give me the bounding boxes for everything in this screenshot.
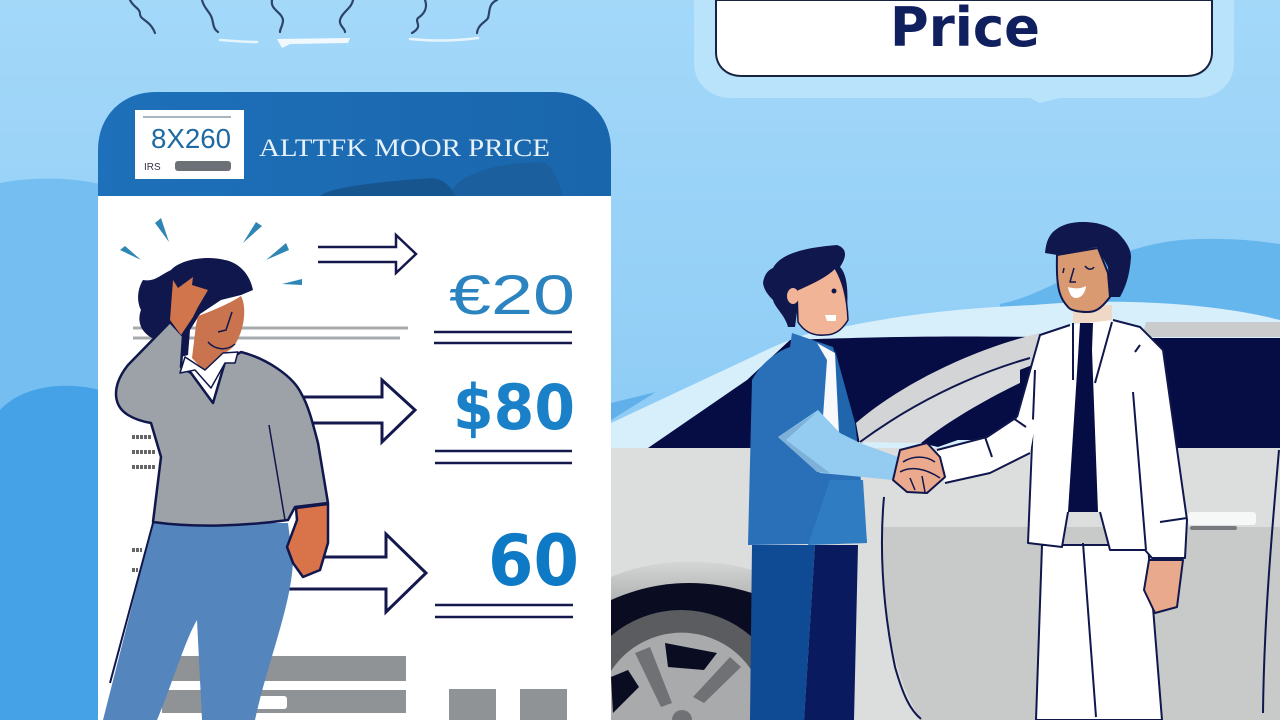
wheel	[611, 562, 752, 720]
value 1: €20	[449, 263, 575, 326]
hand on head	[170, 277, 208, 335]
coat	[1017, 320, 1187, 558]
row 2	[300, 371, 575, 463]
eye	[832, 288, 836, 294]
person: stressed woman	[103, 218, 328, 720]
hand down	[287, 504, 328, 577]
smile	[1068, 286, 1086, 298]
arrow 3	[287, 534, 426, 612]
car body	[611, 448, 1280, 720]
small window	[921, 383, 1020, 447]
a-pillar	[856, 333, 1040, 445]
rear pillar band	[1142, 322, 1280, 337]
jeans	[103, 523, 293, 720]
person: customer in white	[937, 222, 1187, 720]
price tag	[135, 110, 244, 179]
price title callout	[694, 0, 1234, 103]
handshake	[893, 443, 945, 493]
door handle	[1188, 512, 1256, 530]
rear window	[1142, 338, 1280, 448]
squiggle stress marks	[130, 0, 497, 48]
hair	[1045, 222, 1131, 297]
face	[797, 268, 848, 335]
row 3	[287, 520, 579, 617]
tie	[1068, 323, 1098, 512]
person: salesman in blue	[748, 245, 898, 720]
value 2: $80	[453, 371, 575, 444]
header text: ALTTFK MOOR PRICE	[259, 135, 550, 162]
eyes and nose	[1063, 266, 1094, 282]
arm to handshake	[937, 417, 1036, 483]
shirt lapels	[1073, 322, 1187, 550]
panel header	[98, 92, 611, 196]
door lines	[882, 450, 1279, 719]
alarm marks	[120, 218, 302, 285]
mouth	[825, 315, 836, 321]
hand down	[1144, 560, 1183, 613]
sleeve	[778, 410, 898, 480]
price tag: IRS	[144, 162, 161, 173]
trousers	[750, 545, 858, 720]
arrow 1	[318, 235, 416, 273]
car	[611, 302, 1280, 720]
hair back	[763, 245, 847, 327]
roof band	[611, 302, 1280, 450]
ear	[787, 288, 799, 304]
sweater	[116, 322, 328, 526]
shirt collar	[180, 352, 238, 388]
shirt and tie	[817, 343, 839, 435]
arrow 2	[300, 380, 415, 442]
price tag: 8X260	[151, 123, 231, 154]
trousers	[1036, 545, 1162, 720]
jacket	[748, 333, 867, 545]
hair	[138, 258, 253, 360]
face	[1057, 248, 1110, 312]
front window	[648, 336, 1040, 448]
neck and face	[192, 296, 244, 372]
neck	[1073, 305, 1112, 323]
text stubs	[132, 328, 567, 720]
value 3: 60	[488, 520, 579, 602]
row 1	[318, 235, 575, 343]
panel: price sheet	[98, 92, 611, 720]
